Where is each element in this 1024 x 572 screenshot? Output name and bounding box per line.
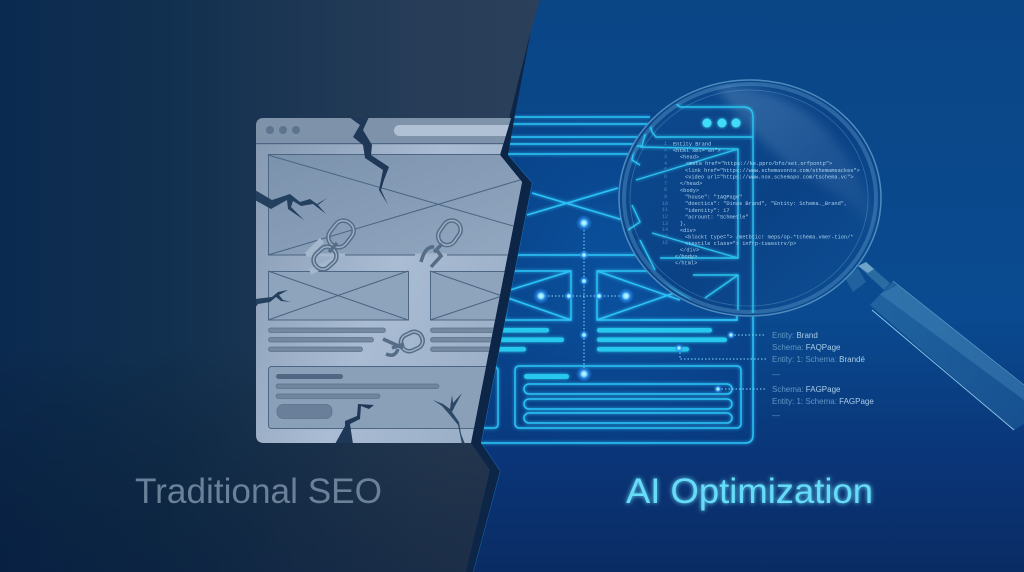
window background <box>508 113 666 440</box>
line numbers: 9 <box>664 194 667 200</box>
schema code: <body> <box>680 188 699 194</box>
browser dots in lens <box>702 118 740 128</box>
left image placeholder <box>268 271 408 320</box>
line numbers: 12 <box>662 214 668 220</box>
line numbers: 8 <box>664 187 667 193</box>
left text lines <box>268 328 386 352</box>
neon wireframe lines <box>480 117 753 443</box>
line numbers: 3 <box>664 154 667 160</box>
line numbers: 16 <box>662 240 668 246</box>
labels: entity and schema annotations: Entity: 1: Schema: FAGPage <box>772 397 874 406</box>
schema code: </html> <box>675 260 697 266</box>
seam: jagged divider <box>466 30 532 572</box>
right text lines <box>430 328 494 352</box>
hero image placeholder <box>268 154 538 255</box>
labels: entity and schema annotations: Entity: 1: Schema: Brandé <box>772 355 865 364</box>
schema code: <link href="https://www.schemavonte.com/sthemameackes"> <box>685 168 860 174</box>
schema code: <video url="https://www.nox.schemapo.com/tschema.vc"> <box>685 174 853 180</box>
schema code: </head> <box>680 181 702 187</box>
icon: broken chain link 2 <box>415 217 464 267</box>
crack: bottom right <box>433 393 465 444</box>
labels: entity and schema annotations: Entity: Brand <box>772 331 818 340</box>
schema code: "acrount: "Schmetle" <box>685 214 749 220</box>
line numbers: 14 <box>662 227 668 233</box>
browser toolbar <box>256 118 526 144</box>
crack: top <box>349 117 389 205</box>
schema code: Entity Brand <box>673 142 711 148</box>
line numbers: 7 <box>664 181 667 187</box>
icon: magnifying glass lens <box>619 80 881 320</box>
crack: lower left <box>256 290 291 306</box>
schema code: "identity": 17 <box>685 208 730 214</box>
crack: upper left <box>255 190 327 220</box>
handle connector <box>858 262 890 290</box>
icon: broken chain link 3 <box>383 329 425 355</box>
handle body <box>870 281 1024 430</box>
background: left dark side <box>0 0 560 572</box>
schema code: }, <box>680 221 686 227</box>
line numbers: 6 <box>664 174 667 180</box>
schema code: </div> <box>680 248 699 254</box>
schema code: <head> <box>680 154 699 160</box>
line numbers: 1 <box>664 141 667 147</box>
labels: entity and schema annotations <box>772 331 874 420</box>
page body <box>256 118 522 443</box>
schema code: <div> <box>680 228 696 234</box>
panel: glowing AI-optimized web page <box>473 112 766 572</box>
line numbers: 4 <box>664 161 667 167</box>
magnified page content <box>628 85 880 320</box>
schema code: <textile class="> infrp-tuaestrv/p> <box>685 241 796 247</box>
magnified neon wireframe <box>628 100 753 320</box>
line numbers: 11 <box>662 207 668 213</box>
schema code: </body> <box>675 254 697 260</box>
background: right blue side <box>473 0 1024 572</box>
line numbers: 2 <box>664 147 667 153</box>
line numbers <box>662 141 668 246</box>
icon: magnifying glass handle <box>845 262 1024 430</box>
line numbers: 15 <box>662 234 668 240</box>
crack: bottom centre <box>335 404 374 444</box>
dotted connectors <box>541 223 766 389</box>
panel: broken traditional web page <box>255 117 538 444</box>
labels: entity and schema annotations: Schema: FAQPage <box>772 343 841 352</box>
title: AI Optimization: AI Optimization <box>626 472 873 511</box>
labels: entity and schema annotations: — <box>772 411 780 420</box>
labels: entity and schema annotations: — <box>772 370 780 379</box>
line numbers: 13 <box>662 221 668 227</box>
schema code: "house": "IAQPage" <box>685 194 742 200</box>
title: Traditional SEO: Traditional SEO <box>135 472 382 511</box>
schema code: <blockt type="> /metbtic! meps/op-*tchema.vmer-tion/* <box>685 234 853 240</box>
schema code: <html xml="en"> <box>673 148 721 154</box>
icon: broken chain link 1 <box>306 212 357 273</box>
schema code: "doectics": "Dinas Brand", "Entity: Schema._Brand", <box>685 201 847 207</box>
glowing text bars <box>490 328 727 379</box>
schema code <box>673 142 860 266</box>
lens highlight <box>716 84 866 210</box>
content box with button <box>268 366 508 428</box>
schema code: <meta href="https://ke.ppro/bfo/set.orfpontp"> <box>686 161 832 167</box>
seam edge highlight <box>473 155 532 572</box>
labels: entity and schema annotations: Schema: FAGPage <box>772 385 841 394</box>
line numbers: 10 <box>662 201 668 207</box>
line numbers: 5 <box>664 167 667 173</box>
right image placeholder <box>430 270 504 320</box>
glowing nodes <box>533 215 736 394</box>
